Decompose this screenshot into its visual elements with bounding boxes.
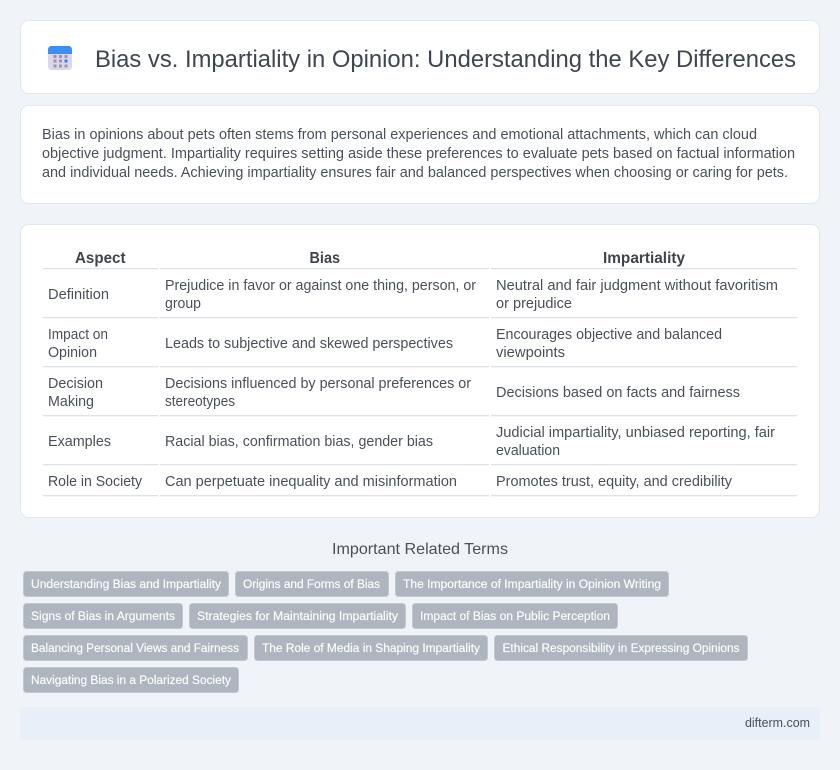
panel: introduction paragraph: objective judgment. Impartiality requires setting aside these preferences to evaluate pets based on factual information	[42, 146, 795, 162]
row: examples: Judicial impartiality, unbiased reporting, fair	[496, 425, 775, 441]
row: impact on opinion: Opinion	[48, 345, 97, 361]
footer: difterm.com	[745, 716, 810, 730]
related term tags: Understanding Bias and Impartiality	[31, 577, 222, 591]
row: impact on opinion: Leads to subjective and skewed perspectives	[165, 336, 453, 352]
row: examples: evaluation	[496, 443, 560, 459]
panel: introduction paragraph	[20, 106, 820, 204]
table header: Impartiality	[603, 250, 685, 267]
row: decision making: stereotypes	[165, 394, 235, 410]
row: definition: group	[165, 296, 201, 312]
row: decision making: Decision	[48, 376, 103, 392]
row: decision making: Decisions based on facts and fairness	[496, 385, 740, 401]
row: examples: Examples	[48, 434, 111, 450]
row: decision making: Making	[48, 394, 94, 410]
heading: important related terms: Important Related Terms	[332, 541, 508, 558]
related term tags: The Importance of Impartiality in Opinion Writing	[403, 577, 661, 591]
row: role in society: Role in Society	[48, 474, 143, 490]
title: Bias vs. Impartiality in Opinion: Understanding the Key Differences	[95, 46, 796, 73]
row: role in society: Promotes trust, equity, and credibility	[496, 474, 733, 490]
row: decision making: Decisions influenced by personal preferences or	[165, 376, 471, 392]
related term tags: Balancing Personal Views and Fairness	[31, 641, 239, 655]
row: definition: Definition	[48, 287, 109, 303]
row: decision making	[48, 376, 740, 410]
row: role in society: Can perpetuate inequality and misinformation	[165, 474, 457, 490]
panel: comparison table	[20, 224, 820, 518]
row: impact on opinion	[48, 327, 722, 361]
row: definition: Prejudice in favor or against one thing, person, or	[165, 278, 476, 294]
table header: Aspect	[75, 250, 126, 267]
table header: Bias	[310, 250, 340, 267]
footer	[20, 707, 820, 740]
table header	[75, 250, 685, 267]
row: impact on opinion: Impact on	[48, 327, 108, 343]
row: definition: Neutral and fair judgment without favoritism	[496, 278, 778, 294]
row: examples: Racial bias, confirmation bias, gender bias	[165, 434, 433, 450]
related term tags: Navigating Bias in a Polarized Society	[31, 673, 232, 687]
panel: introduction paragraph: Bias in opinions about pets often stems from personal experiences and emotional attachments, which can cloud	[42, 127, 757, 143]
related term tags	[24, 572, 748, 692]
row: impact on opinion: viewpoints	[496, 345, 565, 361]
panel: introduction paragraph: and individual needs. Achieving impartiality ensures fair and balanced perspectives when choosing or caring for pets.	[42, 165, 788, 181]
icon: calendar	[48, 46, 72, 70]
row: definition: or prejudice	[496, 296, 572, 312]
row: impact on opinion: Encourages objective and balanced	[496, 327, 722, 343]
row: examples	[48, 425, 775, 459]
related term tags: Impact of Bias on Public Perception	[420, 609, 610, 623]
related term tags: The Role of Media in Shaping Impartiality	[262, 641, 481, 655]
related term tags: Origins and Forms of Bias	[243, 577, 380, 591]
related term tags: Ethical Responsibility in Expressing Opinions	[502, 641, 740, 655]
row: definition	[48, 278, 778, 312]
header panel	[20, 20, 820, 94]
row: role in society	[48, 474, 733, 490]
related term tags: Strategies for Maintaining Impartiality	[197, 609, 399, 623]
related term tags: Signs of Bias in Arguments	[31, 609, 175, 623]
